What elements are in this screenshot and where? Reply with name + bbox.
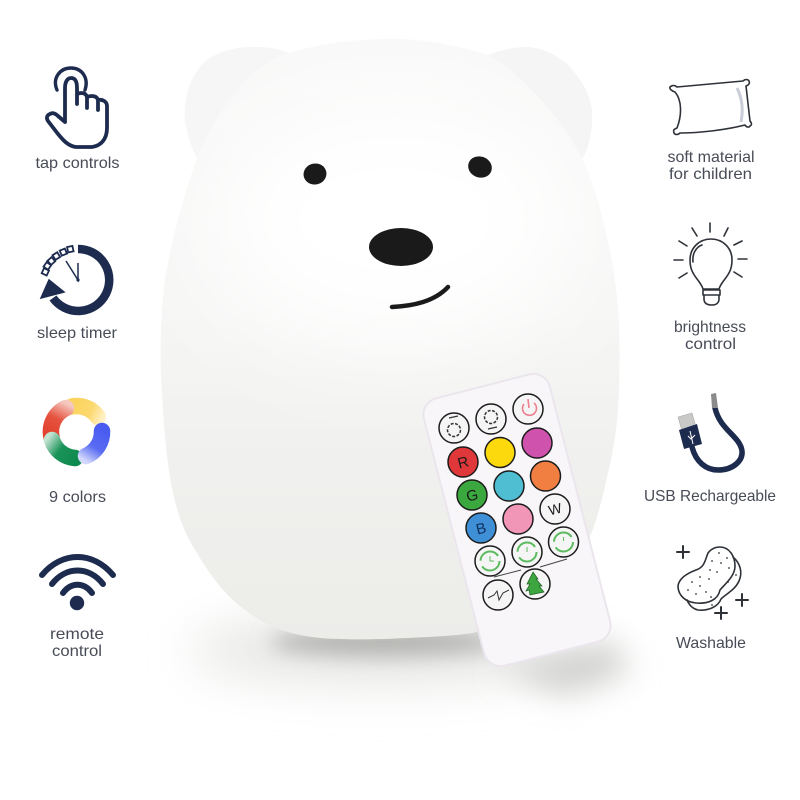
power button: [513, 394, 543, 424]
yellow button: [485, 438, 515, 468]
bear body: [160, 256, 620, 640]
green button: G: [464, 486, 480, 506]
timer button 1: [475, 546, 505, 576]
breathing mode button: [483, 580, 513, 610]
orange button: [530, 461, 560, 491]
magenta button: [522, 428, 552, 458]
feature: soft material: [668, 80, 754, 183]
feature: brightness control: [674, 223, 747, 353]
feature: 9 colors: [49, 406, 106, 506]
timer button 3: [548, 527, 578, 557]
tree mode button: [520, 569, 550, 599]
label: brightness: [674, 319, 746, 336]
red button: R: [456, 453, 471, 473]
feature: remote control: [42, 557, 113, 660]
bear lamp: [150, 30, 630, 650]
feature: tap controls: [36, 68, 120, 172]
icon: wireless signal: [42, 557, 113, 610]
label: [674, 319, 746, 353]
left eye: [302, 161, 328, 187]
right ear: [488, 47, 592, 158]
remote control: [420, 370, 614, 670]
shadow under remote: [500, 640, 630, 695]
red button: [448, 447, 478, 477]
icon: clock with arrow: [41, 246, 109, 311]
feature: sleep timer: [37, 246, 118, 342]
nose: [369, 228, 433, 266]
blue button: B: [474, 519, 488, 538]
timer button 2: [512, 537, 542, 567]
icon: sponge with sparkles: [677, 546, 748, 619]
white button: [540, 494, 570, 524]
shadow under bear: [190, 616, 570, 684]
icon: color ring: [51, 406, 102, 458]
left ear: [185, 47, 288, 158]
remote casing: [420, 370, 614, 670]
icon: USB cable: [678, 393, 742, 470]
icon: light bulb: [674, 223, 747, 305]
pink button: [503, 504, 533, 534]
label: control: [52, 643, 102, 660]
white button: W: [547, 499, 564, 518]
label: 9 colors: [49, 489, 106, 506]
label: [668, 149, 754, 183]
label: soft material: [668, 149, 754, 166]
mouth: [392, 287, 448, 307]
feature: USB rechargeable: [644, 393, 776, 505]
cyan button: [494, 471, 524, 501]
blue button: [466, 513, 496, 543]
label: Washable: [676, 635, 746, 652]
label: remote: [50, 626, 104, 643]
label: sleep timer: [37, 325, 118, 342]
label: [50, 626, 104, 660]
feature: washable: [676, 546, 748, 652]
label: USB Rechargeable: [644, 488, 776, 505]
label: for children: [669, 166, 752, 183]
label: tap controls: [36, 155, 120, 172]
right eye: [465, 153, 495, 181]
brightness down button: [439, 413, 469, 443]
brightness up button: [476, 404, 506, 434]
green button: [457, 480, 487, 510]
label: control: [685, 336, 736, 353]
icon: tapping hand: [47, 68, 107, 147]
icon: pillow: [670, 80, 752, 134]
